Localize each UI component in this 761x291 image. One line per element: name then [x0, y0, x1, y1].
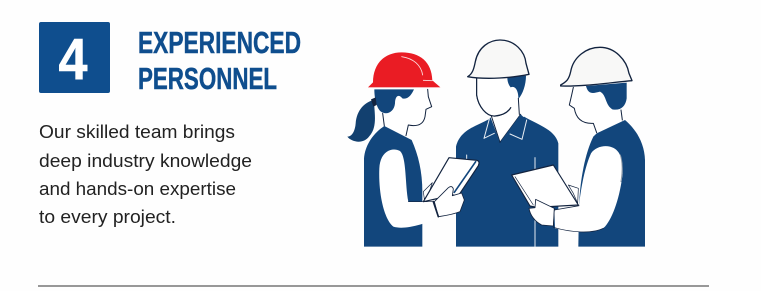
- body text: Our skilled team brings: [39, 121, 235, 142]
- clipboard: [512, 165, 578, 207]
- body text: [39, 121, 252, 227]
- number badge: [39, 22, 110, 93]
- heading: [138, 25, 301, 96]
- worker: centre, white hard hat: [456, 40, 558, 247]
- body text: deep industry knowledge: [39, 150, 252, 171]
- worker: left, red hard hat and ponytail: [347, 52, 479, 247]
- body text: and hands-on expertise: [39, 178, 236, 199]
- tablet: [423, 158, 479, 202]
- body text: to every project.: [39, 206, 176, 227]
- number badge: 4: [58, 27, 88, 92]
- worker: right, white hard hat: [512, 47, 645, 247]
- illustration: three workers with hard hats: [347, 40, 645, 247]
- heading: EXPERIENCED: [138, 25, 301, 60]
- divider: [38, 285, 709, 287]
- heading: PERSONNEL: [138, 61, 277, 96]
